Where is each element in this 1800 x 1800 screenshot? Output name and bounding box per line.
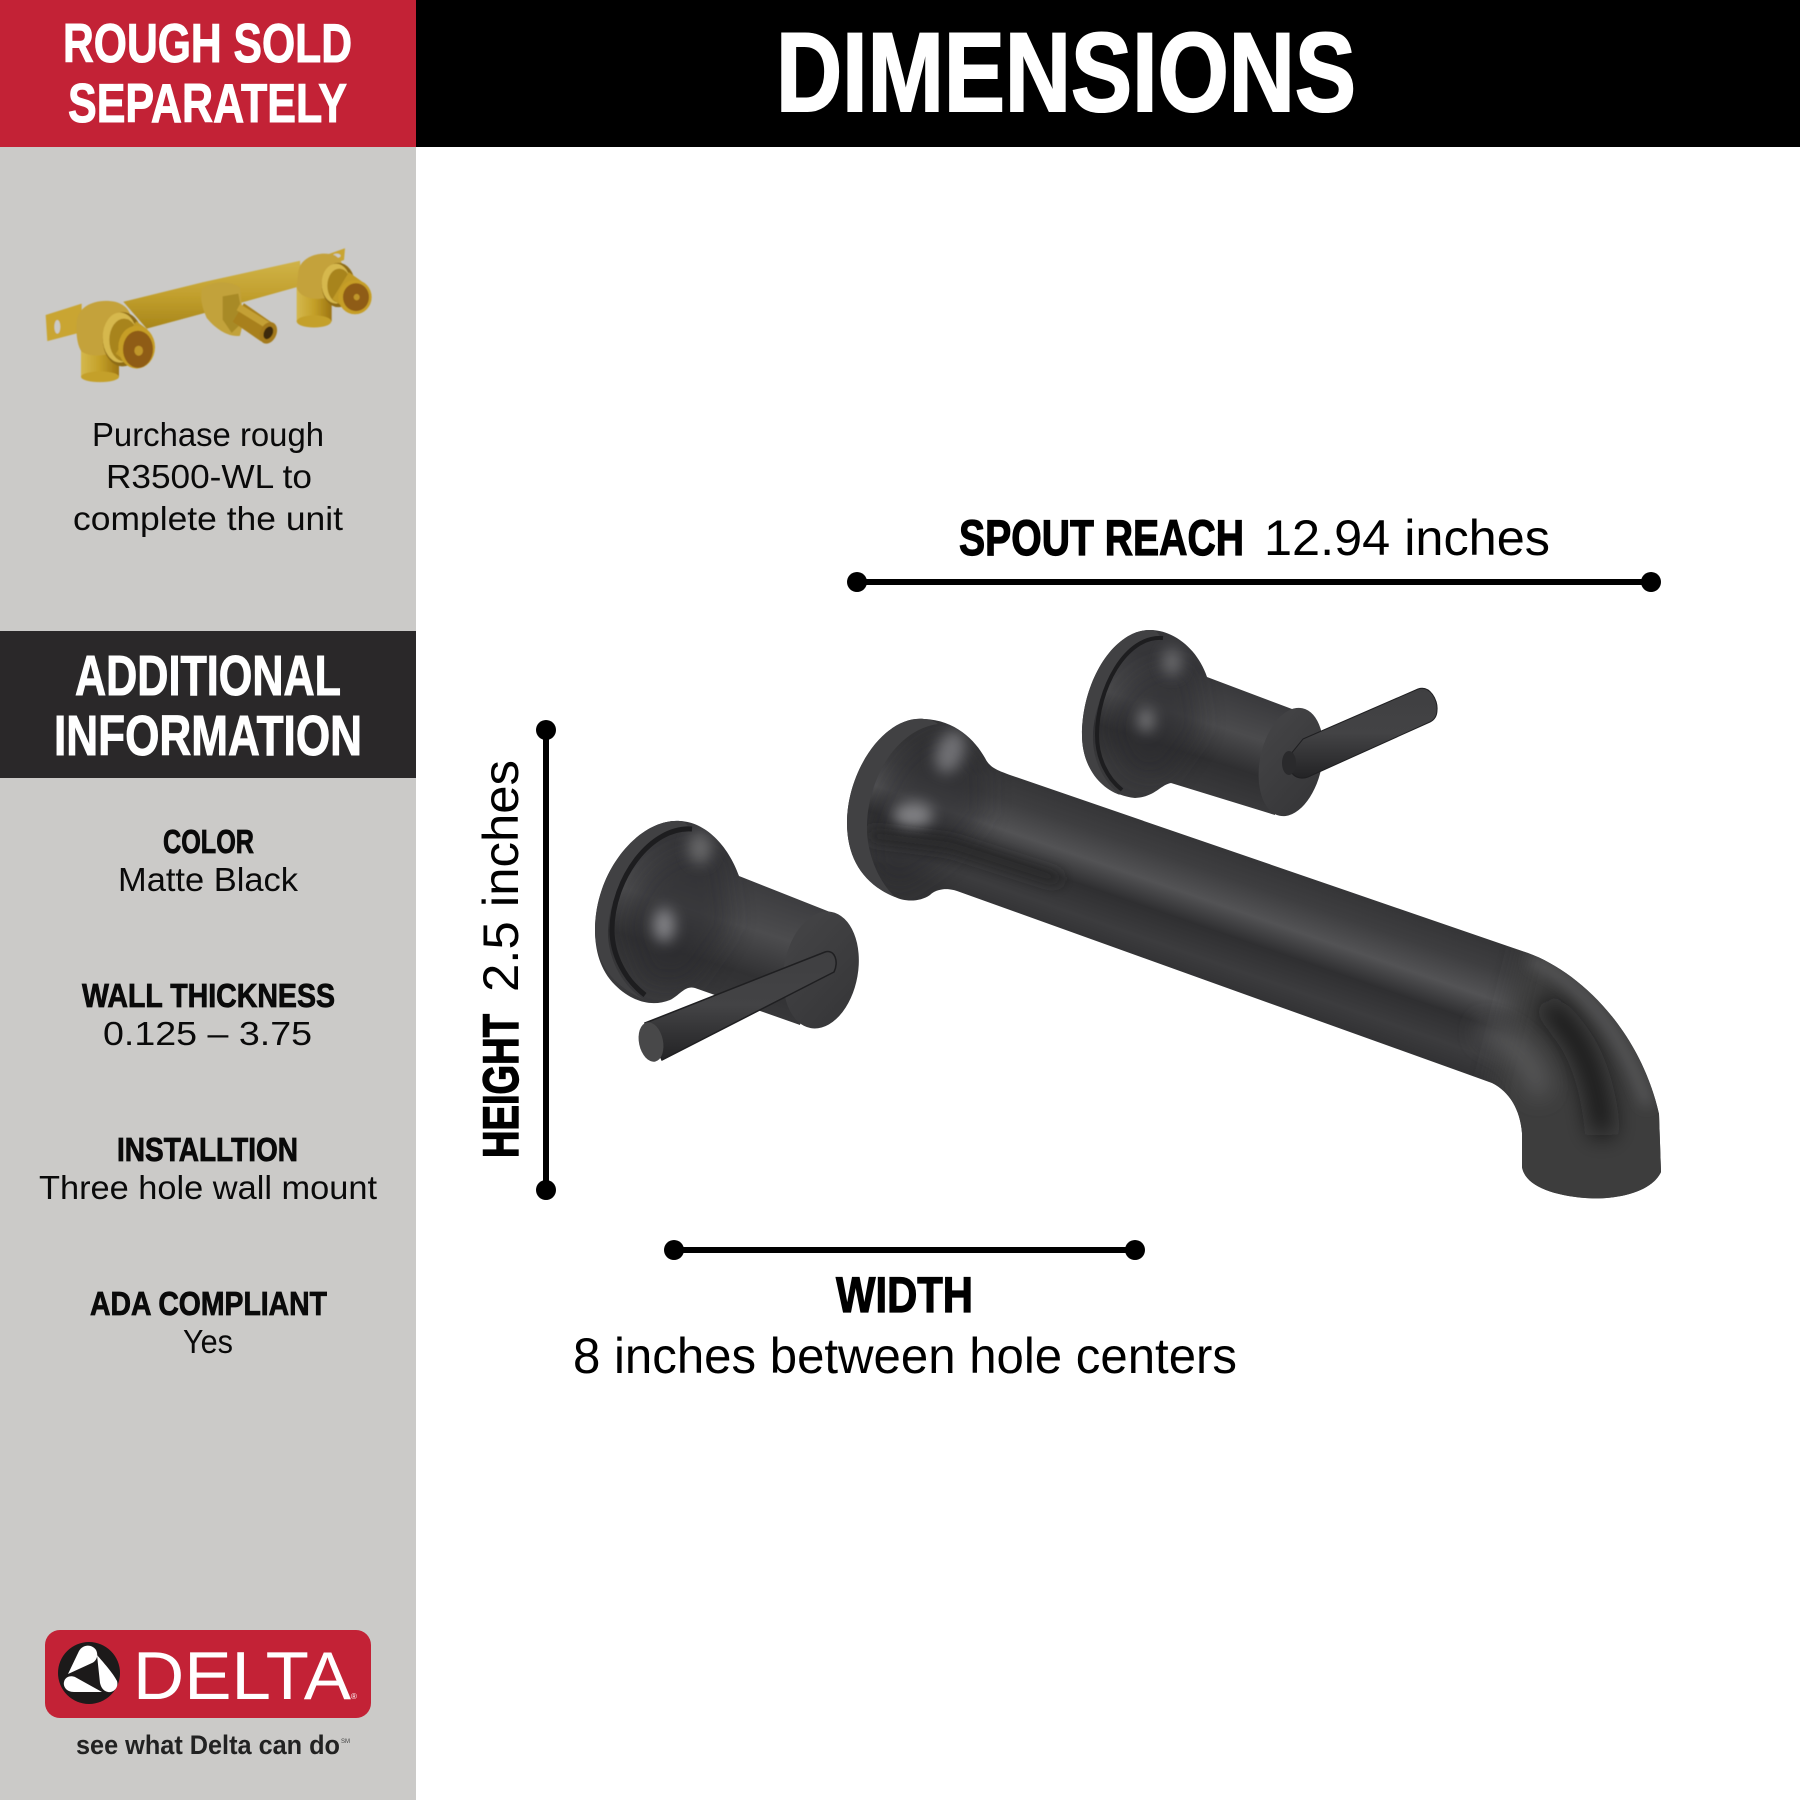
heading: additional information: INFORMATION [54, 704, 362, 768]
image: brass rough valve [46, 248, 372, 382]
banner: rough sold separately: SEPARATELY [68, 72, 347, 134]
image: left handle [595, 821, 868, 1064]
info: color: Matte Black [118, 861, 299, 898]
image: right handle [1082, 630, 1437, 822]
logo: delta: DELTA [133, 1638, 352, 1714]
image: faucet spout [847, 719, 1690, 1220]
logo: delta [45, 1630, 371, 1760]
logo: delta: see what Delta can do [76, 1730, 340, 1760]
info: ada compliant: ADA COMPLIANT [90, 1285, 327, 1322]
text: purchase rough note: Purchase rough [92, 416, 324, 453]
info: installation: INSTALLTION [117, 1131, 298, 1168]
info: ada compliant: Yes [183, 1323, 233, 1360]
banner: rough sold separately [0, 0, 416, 147]
text: purchase rough note: R3500-WL to [106, 458, 312, 495]
banner: rough sold separately: ROUGH SOLD [63, 12, 352, 74]
dimension: width: 8 inches between hole centers [573, 1328, 1237, 1384]
info: wall thickness: 0.125 – 3.75 [103, 1015, 312, 1052]
dimension: height: 2.5 inches [473, 760, 529, 992]
info: wall thickness [82, 977, 335, 1052]
dimension: width: WIDTH [836, 1267, 973, 1323]
panel: grey sidebar [0, 0, 416, 1800]
heading: additional information: ADDITIONAL [75, 644, 341, 708]
info: installation: Three hole wall mount [39, 1169, 377, 1206]
text: purchase rough note: complete the unit [73, 500, 343, 537]
info: wall thickness: WALL THICKNESS [82, 977, 335, 1014]
info: installation [39, 1131, 377, 1206]
title banner: dimensions [416, 0, 1800, 147]
info: ada compliant [90, 1285, 327, 1360]
heading: additional information [0, 631, 416, 778]
info: color [118, 823, 299, 898]
dimension: height: HEIGHT [473, 1014, 529, 1158]
dimension: spout reach: 12.94 inches [1264, 510, 1550, 566]
dimension: width [573, 1240, 1237, 1384]
dimension: spout reach [847, 510, 1661, 592]
info: color: COLOR [163, 823, 254, 860]
logo: delta: SM [341, 1739, 350, 1745]
text: purchase rough note [73, 416, 343, 537]
title banner: dimensions: DIMENSIONS [776, 10, 1356, 135]
dimension: spout reach: SPOUT REACH [959, 510, 1244, 566]
logo: delta: ® [351, 1692, 357, 1701]
dimension: height [473, 720, 556, 1200]
